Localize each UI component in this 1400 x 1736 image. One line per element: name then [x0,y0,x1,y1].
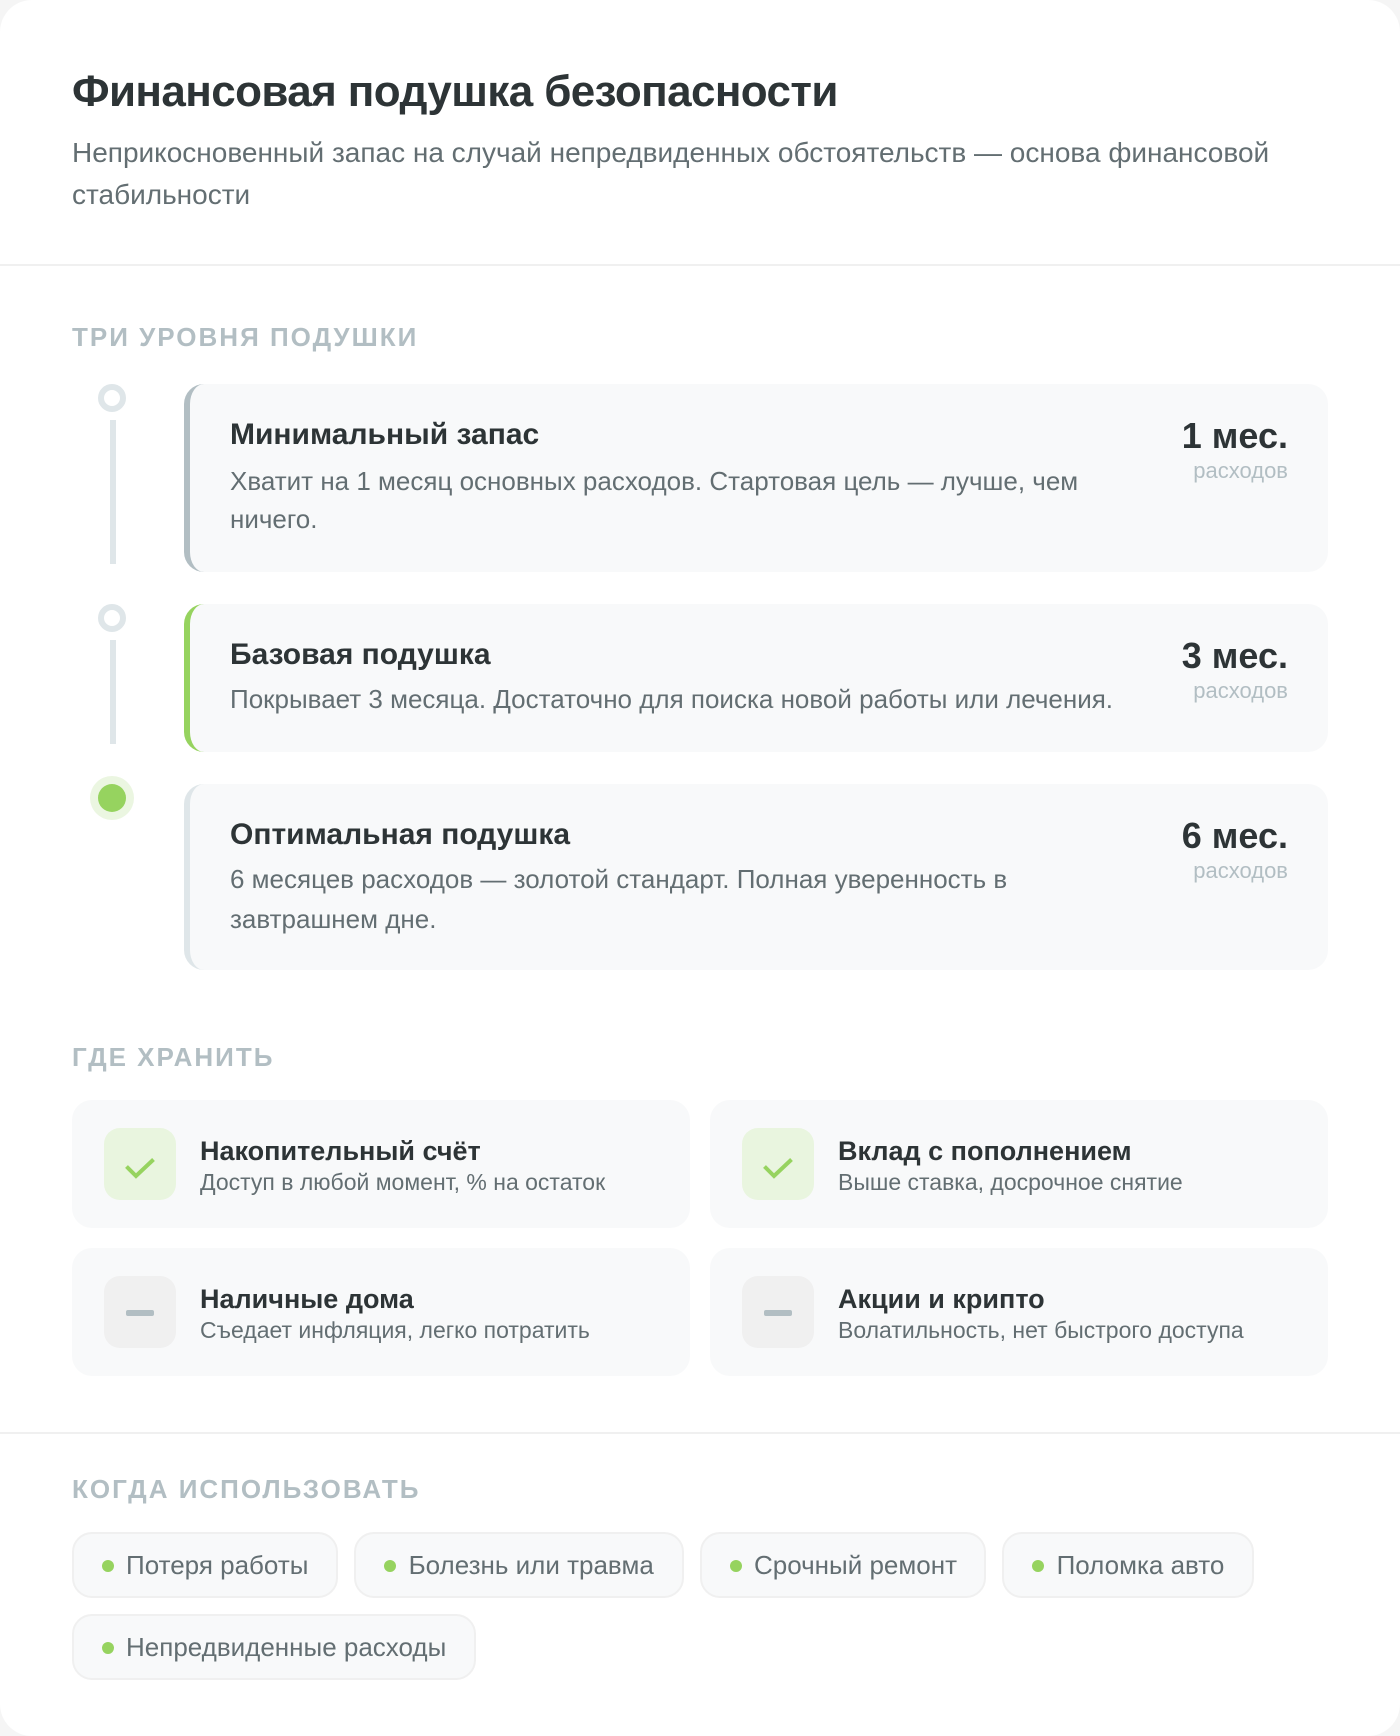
chip: illness [354,1532,684,1598]
timeline marker 3 [98,784,126,812]
level 2 unit: расходов [1193,678,1288,703]
level 2 description: Покрывает 3 месяца. Достаточно для поиска новой работы или лечения. [230,684,1113,714]
title: Финансовая подушка безопасности [72,67,838,116]
timeline marker 2 [98,604,126,632]
level 3 description: 6 месяцев расходов — золотой стандарт. Полная уверенность в завтрашнем дне. [230,864,1007,934]
level 1 title: Минимальный запас [230,418,539,451]
chip: illness: Болезнь или травма [409,1550,654,1580]
chip: car breakdown: Поломка авто [1057,1550,1224,1580]
chip: urgent repair: Срочный ремонт [754,1550,957,1580]
stocks note: Волатильность, нет быстрого доступа [838,1317,1244,1343]
chip: unexpected expenses: Непредвиденные расходы [126,1632,446,1662]
deposit note: Выше ставка, досрочное снятие [838,1169,1183,1195]
level card: minimal [184,384,1328,572]
level card: optimal [184,784,1328,970]
stocks title: Акции и крипто [838,1284,1045,1314]
storage card: stocks and crypto [710,1248,1328,1376]
chip: job loss [72,1532,338,1598]
cash title: Наличные дома [200,1284,414,1314]
level 3 title: Оптимальная подушка [230,818,570,851]
level 2 title: Базовая подушка [230,638,491,671]
icon: check [104,1128,176,1200]
timeline marker 1 [98,384,126,412]
chip: car breakdown [1002,1532,1254,1598]
level 3 unit: расходов [1193,858,1288,883]
storage card: deposit [710,1100,1328,1228]
subtitle: Неприкосновенный запас на случай непредвиденных обстоятельств — основа финансовой стабильности [72,137,1269,210]
savings account note: Доступ в любой момент, % на остаток [200,1169,605,1195]
icon: check [742,1128,814,1200]
section heading: when to use: КОГДА ИСПОЛЬЗОВАТЬ [72,1474,420,1504]
section heading: storage: ГДЕ ХРАНИТЬ [72,1042,274,1072]
cash note: Съедает инфляция, легко потратить [200,1317,590,1343]
level 1 description: Хватит на 1 месяц основных расходов. Стартовая цель — лучше, чем ничего. [230,466,1078,534]
storage card: savings account [72,1100,690,1228]
savings account title: Накопительный счёт [200,1136,481,1166]
level 2 value: 3 мес. [1182,635,1288,676]
deposit title: Вклад с пополнением [838,1136,1132,1166]
level 1 value: 1 мес. [1182,415,1288,456]
storage card: cash [72,1248,690,1376]
section heading: levels: ТРИ УРОВНЯ ПОДУШКИ [72,322,418,352]
level 3 value: 6 мес. [1182,815,1288,856]
icon: dash [104,1276,176,1348]
icon: dash [742,1276,814,1348]
chip: job loss: Потеря работы [126,1550,308,1580]
level card: base [184,604,1328,752]
level 1 unit: расходов [1193,458,1288,483]
chip: urgent repair [700,1532,986,1598]
chip: unexpected expenses [72,1614,476,1680]
